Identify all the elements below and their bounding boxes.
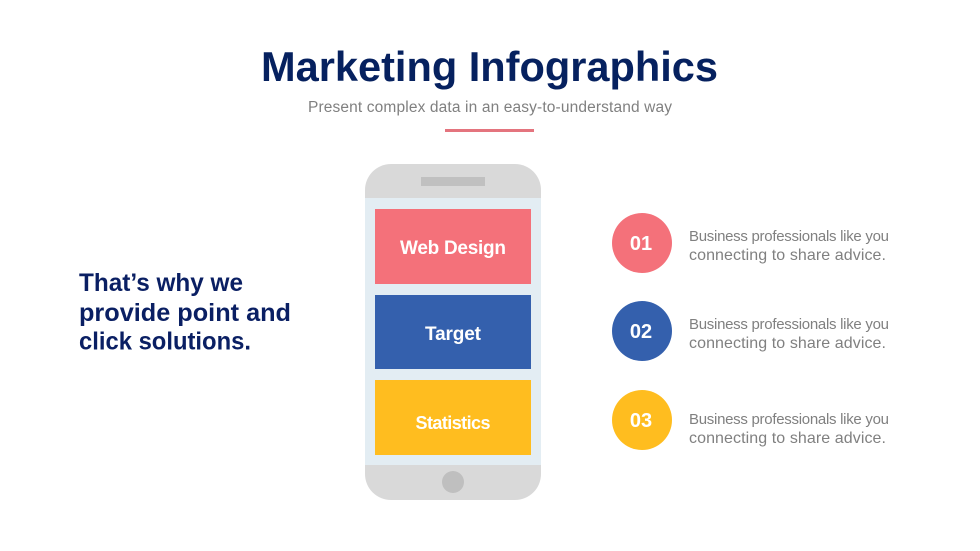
panel: web design — [375, 209, 531, 284]
panel: target: Target — [425, 324, 482, 345]
description 02: Business professionals like you — [689, 316, 889, 333]
description 02: connecting to share advice. — [689, 335, 886, 352]
badge 01 — [612, 213, 672, 273]
description 03: Business professionals like you — [689, 411, 889, 428]
description 03 — [689, 411, 889, 447]
item 01 — [612, 213, 889, 273]
subtitle: Present complex data in an easy-to-understand way — [308, 99, 672, 116]
title: Marketing Infographics — [261, 43, 718, 90]
phone illustration — [365, 164, 541, 500]
left statement text: click solutions. — [79, 328, 251, 356]
description 01: Business professionals like you — [689, 228, 889, 245]
panel: target — [375, 295, 531, 369]
item 03 — [612, 390, 889, 450]
badge 02 — [612, 301, 672, 361]
title underline — [445, 129, 534, 132]
panel: statistics: Statistics — [416, 413, 490, 433]
phone screen — [365, 198, 541, 465]
left statement text — [79, 269, 291, 356]
home button — [442, 471, 464, 493]
panel: statistics — [375, 380, 531, 455]
badge 03 — [612, 390, 672, 450]
description 01: connecting to share advice. — [689, 247, 886, 264]
badge 03: 03 — [630, 410, 652, 432]
phone speaker — [421, 177, 485, 186]
left statement text: provide point and — [79, 299, 291, 327]
left statement text: That’s why we — [79, 269, 243, 297]
badge 01: 01 — [630, 233, 652, 255]
panel: web design: Web Design — [400, 238, 506, 259]
phone body — [365, 164, 541, 500]
description 03: connecting to share advice. — [689, 430, 886, 447]
description 01 — [689, 228, 889, 264]
badge 02: 02 — [630, 321, 652, 343]
item 02 — [612, 301, 889, 361]
description 02 — [689, 316, 889, 352]
